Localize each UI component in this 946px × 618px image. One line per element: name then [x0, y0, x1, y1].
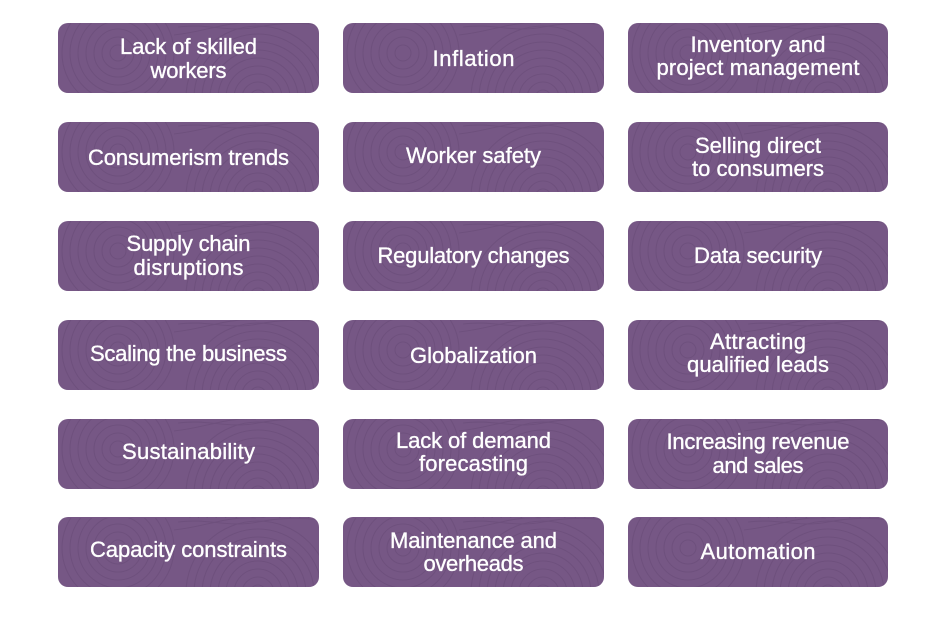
card: Capacity constraints: Capacity constraints: [90, 537, 287, 562]
card: Inflation: Inflation: [432, 46, 514, 71]
card: Automation: [628, 517, 888, 587]
card: Lack of demand forecasting: Lack of demand: [396, 428, 551, 453]
card: Attracting qualified leads: qualified leads: [687, 352, 829, 377]
card: Maintenance and overheads: overheads: [424, 551, 524, 576]
card: Selling direct to consumers: Selling direct: [695, 133, 821, 158]
card: Data security: [628, 221, 888, 291]
card: Worker safety: Worker safety: [406, 143, 541, 168]
card: Increasing revenue and sales: Increasing revenue: [666, 429, 850, 454]
card: Maintenance and overheads: [343, 517, 604, 587]
card: Consumerism trends: Consumerism trends: [88, 145, 289, 170]
card: Data security: Data security: [694, 243, 822, 268]
card: Globalization: Globalization: [410, 343, 537, 368]
card: Lack of demand forecasting: forecasting: [419, 451, 528, 476]
card: Inventory and project management: project management: [656, 55, 860, 80]
card: Sustainability: Sustainability: [122, 439, 255, 464]
card: Consumerism trends: [58, 122, 319, 192]
card: Scaling the business: Scaling the business: [90, 341, 287, 366]
card: Regulatory changes: [343, 221, 604, 291]
card: Sustainability: [58, 419, 319, 489]
card: Lack of skilled workers: Lack of skilled: [120, 34, 257, 59]
card: Inventory and project management: Inventory and: [690, 32, 826, 57]
card: Attracting qualified leads: Attracting: [710, 329, 806, 354]
card: Scaling the business: [58, 320, 319, 390]
card: Automation: Automation: [700, 539, 816, 564]
card: Lack of demand forecasting: [343, 419, 604, 489]
card: Lack of skilled workers: workers: [150, 58, 226, 83]
card: Attracting qualified leads: [628, 320, 888, 390]
card: Worker safety: [343, 122, 604, 192]
card: Inflation: [343, 23, 604, 93]
card: Maintenance and overheads: Maintenance and: [390, 528, 557, 553]
card: Globalization: [343, 320, 604, 390]
card: Supply chain disruptions: [58, 221, 319, 291]
card: Increasing revenue and sales: and sales: [712, 453, 804, 478]
card: Supply chain disruptions: Supply chain: [126, 231, 250, 256]
card: Lack of skilled workers: [58, 23, 319, 93]
card: Inventory and project management: [628, 23, 888, 93]
card: Increasing revenue and sales: [628, 419, 888, 489]
card: Capacity constraints: [58, 517, 319, 587]
card: Selling direct to consumers: to consumers: [692, 156, 824, 181]
card: Regulatory changes: Regulatory changes: [378, 243, 570, 268]
card: Supply chain disruptions: disruptions: [134, 255, 244, 280]
card: Selling direct to consumers: [628, 122, 888, 192]
